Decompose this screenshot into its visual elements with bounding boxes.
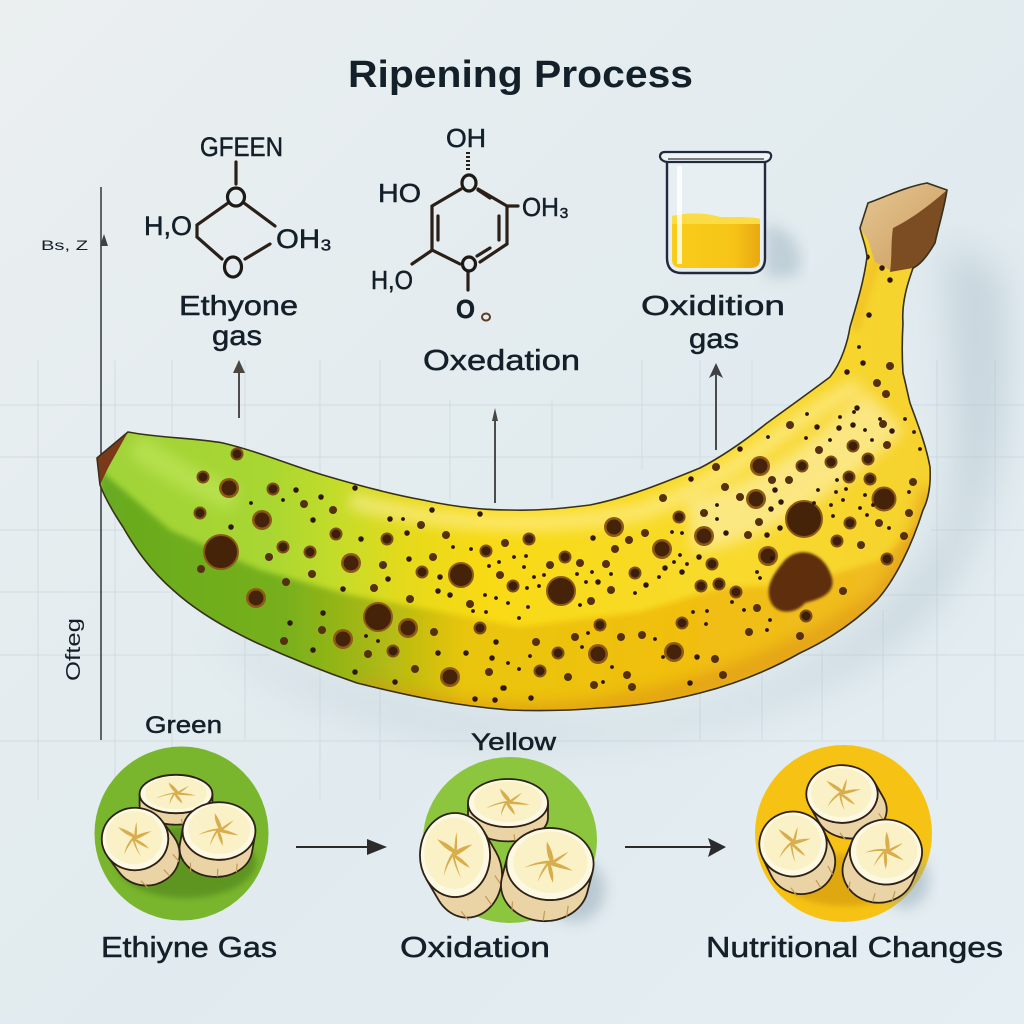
arrow: up from banana to ethyone	[233, 360, 245, 418]
label: Yellow: Yellow	[471, 729, 557, 756]
molecule: ring structure: O	[456, 294, 475, 324]
label: Oxidition gas: gas	[689, 323, 739, 354]
banana	[90, 170, 1005, 740]
stage: nutritional circle with slices	[748, 745, 932, 922]
molecule: ring structure: H,O	[371, 265, 413, 295]
molecule: left structure: GFEEN	[200, 132, 283, 162]
label: Ethyone gas: Ethyone	[179, 290, 298, 321]
axis: vertical chart axis: Bs, Z	[41, 237, 89, 253]
label: Oxedation: Oxedation	[423, 345, 580, 377]
large spots	[204, 488, 896, 631]
molecule: left structure	[144, 132, 332, 277]
molecule: left structure: OH₃	[276, 224, 332, 254]
label: Green: Green	[145, 712, 222, 739]
arrow: green to yellow	[296, 839, 387, 855]
label: Oxidition gas	[641, 290, 785, 354]
brown blotch	[769, 552, 833, 612]
arrow: middle line	[492, 408, 498, 503]
arrow: up to oxidition	[709, 363, 723, 450]
molecule: ring structure	[371, 123, 569, 324]
banana outline	[97, 183, 947, 711]
molecule: ring structure: OH	[446, 123, 486, 153]
label: Nutritional Changes: Nutritional Changes	[706, 932, 1003, 964]
stem end	[860, 183, 947, 270]
arrow: yellow to nutrition	[625, 838, 726, 857]
beaker	[660, 152, 801, 278]
label: Ethyone gas: gas	[212, 320, 262, 351]
title: Ripening Process	[348, 54, 693, 96]
banana body	[90, 170, 950, 730]
stage: green circle with slices	[89, 746, 268, 920]
molecule: ring structure: HO	[378, 178, 421, 208]
medium spots	[200, 257, 920, 700]
molecule: left structure: H,O	[144, 211, 192, 241]
molecule: ring structure: OH₃	[522, 192, 569, 222]
label: Ethiyne Gas: Ethiyne Gas	[101, 932, 277, 964]
label: Ethyone gas	[179, 290, 298, 351]
label: Oxidition gas: Oxidition	[641, 290, 785, 321]
label: Oxidation: Oxidation	[400, 932, 550, 964]
banana tip	[97, 432, 128, 485]
stage: yellow label circle with slices	[406, 757, 605, 934]
axis: vertical chart axis: Ofteg	[63, 618, 85, 681]
axis: vertical chart axis	[41, 187, 108, 740]
